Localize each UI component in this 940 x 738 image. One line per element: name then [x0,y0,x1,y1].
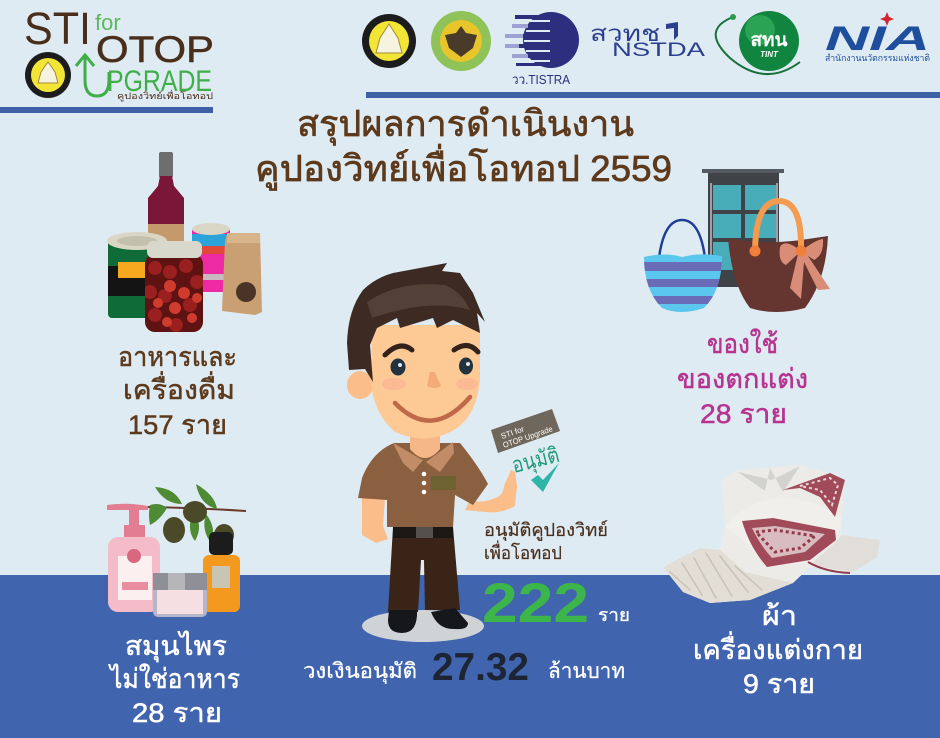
logo: TISTRA [505,12,579,87]
label: household and decor: 28 ราย [700,399,787,429]
logo: TISTRA: วว.TISTRA [512,72,570,87]
label: herbal non-food: สมุนไพร [125,631,227,663]
approved budget: วงเงินอนุมัติ [303,660,417,684]
blue floor band [0,575,940,738]
approved count 222 [482,571,630,634]
approved budget: 27.32 [432,646,529,689]
approved vouchers text: อนุมัติคูปองวิทย์ [484,520,608,541]
approved count 222: 222 [482,571,589,634]
illustration: bags and decor [640,169,830,320]
approval card: OTOP Upgrade [502,424,554,450]
left header bar [0,107,213,113]
logo: NIA [825,12,930,63]
label: household and decor: ของตกแต่ง [677,364,808,394]
label: food and drink: อาหารและ [118,342,237,372]
logo: STI for OTOP Upgrade: PGRADE [107,65,212,98]
title: สรุปผลการดำเนินงาน [297,103,634,146]
logo: NIA: สำนักงานนวัตกรรมแห่งชาติ [825,53,930,63]
label: textiles and apparel: 9 ราย [743,669,815,699]
approval card [491,409,562,492]
illustration: food and drink products [107,152,262,332]
approval card: อนุมัติ [509,442,562,479]
approval card: STI for [500,424,526,441]
title [255,103,672,191]
logo: TINT [716,11,800,74]
label: herbal non-food [108,631,240,728]
logo: STI for OTOP Upgrade: คูปองวิทย์เพื่อโอทอป [117,89,213,102]
logo: NSTDA: NSTDA [612,40,705,61]
label: food and drink [118,342,237,440]
approved budget [303,646,625,689]
logo: TINT: TINT [760,50,779,59]
label: household and decor: ของใช้ [707,328,778,359]
logo: NSTDA [590,21,705,61]
illustration: scarf [663,465,880,603]
illustration: herbal cosmetics [107,484,246,617]
logo: STI for OTOP Upgrade [24,3,214,102]
logo: ministry seal [362,14,416,68]
logo: department of science service [431,11,491,71]
approved vouchers text: เพื่อโอทอป [484,540,562,563]
approved budget: ล้านบาท [548,660,625,683]
label: textiles and apparel [693,601,863,699]
label: food and drink: เครื่องดื่ม [123,371,235,405]
right header bar [366,92,940,98]
logo: STI for OTOP Upgrade: STI [24,3,91,54]
logo: STI for OTOP Upgrade: OTOP [96,29,214,70]
logo: NIA: NIA [825,20,930,58]
approved vouchers text [484,520,608,563]
approved count 222: ราย [598,605,630,625]
label: herbal non-food: 28 ราย [132,698,222,728]
label: textiles and apparel: เครื่องแต่งกาย [693,631,863,665]
logo: TINT: สทน [750,30,788,51]
logo: STI for OTOP Upgrade: for [95,10,121,35]
label: food and drink: 157 ราย [128,410,227,440]
title: คูปองวิทย์เพื่อโอทอป 2559 [255,144,672,191]
label: household and decor [677,328,808,429]
character: smiling man holding approval card [347,263,517,642]
logo: NSTDA: สวทช [590,21,660,46]
label: textiles and apparel: ผ้า [762,601,797,631]
label: herbal non-food: ไม่ใช่อาหาร [108,663,240,694]
